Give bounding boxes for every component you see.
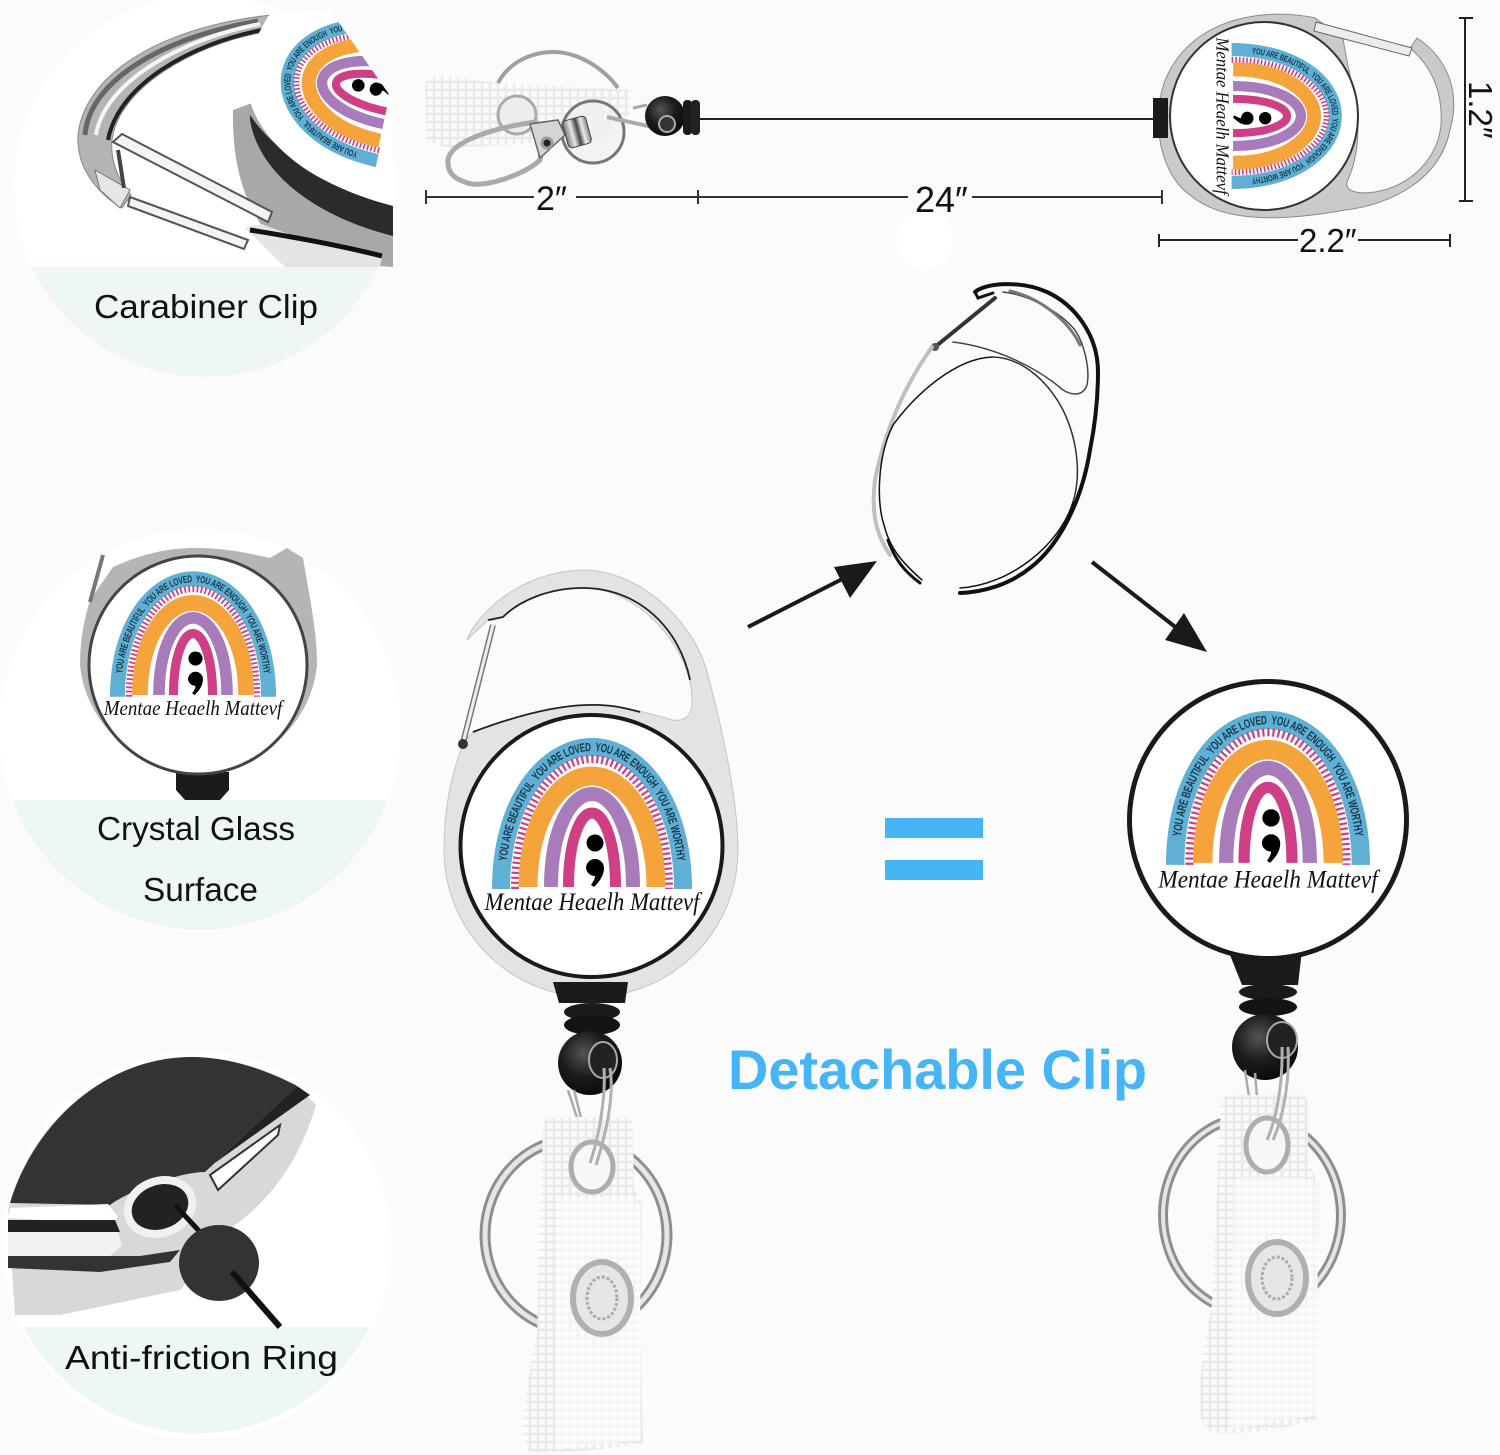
- cord housing: [1228, 950, 1302, 985]
- rainbow logo: Mentae Heaelh Mattevf: [1157, 864, 1381, 893]
- split ring: [498, 52, 618, 88]
- rainbow logo: Mentae Heaelh Mattevf: [484, 889, 702, 916]
- clear strap: [425, 75, 630, 148]
- black ball and beads: [645, 96, 700, 136]
- rainbow logo: YOU ARE BEAUTIFUL YOU ARE LOVED YOU ARE ENOUGH YOU ARE WORTHY: [1172, 716, 1364, 836]
- gate bar: [463, 625, 493, 743]
- product: reel head rotated: [1153, 14, 1454, 218]
- photo: glass dome badge: [80, 548, 317, 800]
- label: crystal glass: Crystal Glass: [97, 810, 295, 847]
- silver body: [444, 570, 738, 997]
- rainbow logo: [1157, 710, 1381, 893]
- arrow: to detached clip: [748, 561, 877, 627]
- heading: detachable clip: Detachable Clip: [728, 1038, 1147, 1101]
- hook wire front: [1267, 1047, 1288, 1140]
- key ring: [1163, 1117, 1341, 1313]
- disc: [460, 715, 722, 977]
- strap eyelet: [1246, 1118, 1288, 1172]
- arrow: to black reel: [1092, 562, 1207, 652]
- panel: anti-friction ring: [3, 1051, 391, 1439]
- rainbow dome crop: [250, 14, 393, 206]
- label: carabiner clip: Carabiner Clip: [94, 288, 318, 325]
- rainbow logo: YOU ARE BEAUTIFUL YOU ARE LOVED YOU ARE ENOUGH YOU ARE WORTHY: [498, 742, 686, 860]
- photo: glass dome badge: Mentae Heaelh Mattevf: [103, 698, 285, 720]
- photo: glass dome badge: YOU ARE BEAUTIFUL YOU ARE LOVED YOU ARE ENOUGH YOU ARE WORTHY: [115, 575, 271, 673]
- wire hooks: [568, 1090, 581, 1118]
- strap eyelet: [571, 1142, 613, 1192]
- faint white blob: [897, 209, 953, 271]
- dimension: 2 inch: 2″: [536, 180, 567, 218]
- dimension: 2.2 inch: [1159, 222, 1450, 259]
- rainbow logo: [484, 738, 702, 916]
- cord housing: [553, 982, 628, 1003]
- snap button: [1248, 1242, 1306, 1314]
- wire hooks: [1245, 1070, 1257, 1097]
- product: stretched reel at top: [425, 52, 1155, 184]
- label: anti-friction ring: Anti-friction Ring: [65, 1339, 338, 1376]
- rainbow logo rotated: YOU ARE BEAUTIFUL YOU ARE LOVED YOU ARE ENOUGH YOU ARE WORTHY: [1252, 48, 1338, 184]
- equals sign: [885, 818, 983, 880]
- strap second layer: [555, 1197, 640, 1450]
- photo: anti-friction ring close-up: [8, 1057, 316, 1327]
- black disc: [1127, 679, 1409, 961]
- clear strap: [1199, 1095, 1318, 1433]
- strap second layer: [1230, 1177, 1317, 1430]
- rainbow dome crop: YOU ARE BEAUTIFUL YOU ARE LOVED YOU ARE ENOUGH YOU ARE WORTHY: [284, 25, 356, 158]
- beads and ball: [558, 1003, 622, 1095]
- rainbow logo rotated: Mentae Heaelh Mattevf: [1212, 37, 1232, 197]
- snap button: [573, 1262, 631, 1334]
- label: surface: Surface: [143, 871, 258, 908]
- detached carabiner clip outline: [874, 284, 1098, 593]
- product: silver carabiner reel: [444, 570, 738, 1453]
- product: black reel: [1127, 679, 1409, 1434]
- inner hook line: [473, 588, 690, 732]
- snap and hardware: [448, 96, 657, 184]
- rainbow logo rotated: [1212, 37, 1342, 197]
- panel: crystal glass surface: [12, 548, 388, 930]
- hook wire front: [590, 1068, 611, 1165]
- photo: carabiner close-up: [78, 15, 393, 267]
- dimension: 1.2 inch: 1.2″: [1462, 81, 1499, 139]
- clear strap: [524, 1117, 643, 1453]
- beads and ball: [1232, 984, 1298, 1080]
- panel: carabiner clip: [32, 14, 393, 377]
- dimension: 24 inch: 24″: [915, 179, 968, 220]
- cord: [700, 118, 1155, 120]
- dimension: 2.2 inch: 2.2″: [1299, 222, 1357, 259]
- key ring: [485, 1139, 667, 1331]
- dimension: 1.2 inch: [1459, 18, 1499, 201]
- dimension: 2 inch: [426, 180, 698, 218]
- dimension: 24 inch: [698, 179, 1162, 220]
